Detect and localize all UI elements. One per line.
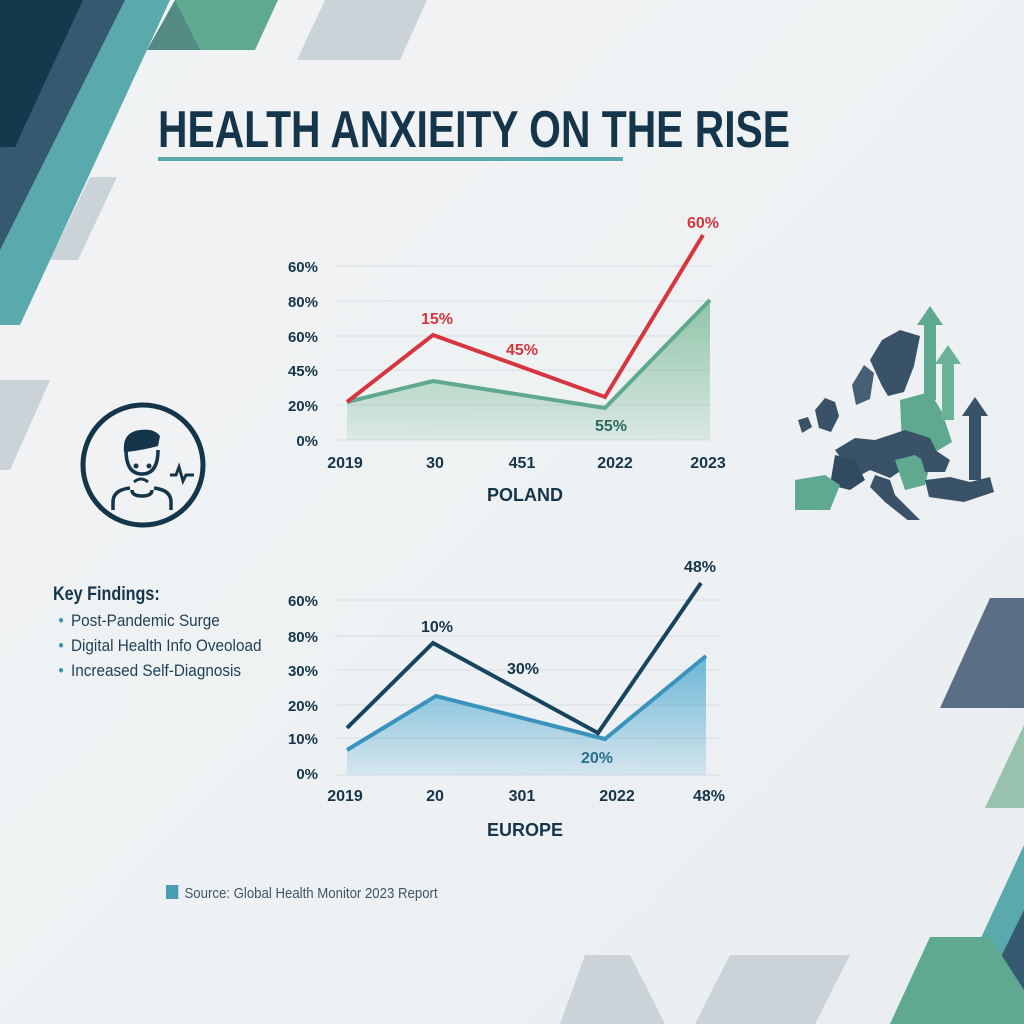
chart: Europe: 48% <box>684 559 716 576</box>
chart: Europe: 30% <box>507 661 539 678</box>
chart: Europe: 20 <box>426 788 444 805</box>
findings list: • Post-Pandemic Surge <box>58 611 220 630</box>
chart: Europe: 20% <box>581 750 613 767</box>
title underline <box>158 157 623 161</box>
chart: Europe: 48% <box>693 788 725 805</box>
chart: Poland: 451 <box>509 455 535 472</box>
arrows <box>917 306 988 480</box>
map of Europe with arrows <box>795 306 994 520</box>
chart: Poland: 60% <box>288 259 318 276</box>
chart: Poland: 15% <box>421 311 453 328</box>
chart: Poland: 60% <box>687 215 719 232</box>
chart: Poland: 45% <box>288 363 318 380</box>
source note: Source: Global Health Monitor 2023 Report <box>184 885 438 902</box>
key findings heading: Key Findings: <box>53 584 160 605</box>
chart: Europe: 80% <box>288 629 318 646</box>
icon: anxious person <box>80 402 206 528</box>
chart: Europe: 2022 <box>599 788 635 805</box>
chart: Europe: EUROPE <box>487 820 563 840</box>
chart: Poland: 2023 <box>690 455 726 472</box>
chart: Poland: 2022 <box>597 455 633 472</box>
chart: Europe: 301 <box>509 788 535 805</box>
chart: Poland: POLAND <box>487 485 563 505</box>
chart: Poland: 80% <box>288 294 318 311</box>
chart: Europe: 0% <box>296 766 318 783</box>
chart: Europe: 2019 <box>327 788 363 805</box>
chart: Europe: 10% <box>421 619 453 636</box>
findings list <box>58 611 261 680</box>
chart: Poland: 20% <box>288 398 318 415</box>
title: HEALTH ANXIEITY ON THE RISE <box>158 101 790 159</box>
chart: Poland: 2019 <box>327 455 363 472</box>
chart: Europe: 10% <box>288 731 318 748</box>
chart: Poland: 0% <box>296 433 318 450</box>
chart: Poland: 30 <box>426 455 444 472</box>
chart: Europe: 20% <box>288 698 318 715</box>
key findings <box>53 584 261 680</box>
findings list: • Digital Health Info Oveoload <box>58 636 261 655</box>
chart: Europe: 30% <box>288 663 318 680</box>
findings list: • Increased Self-Diagnosis <box>58 661 241 680</box>
chart: Poland: 45% <box>506 342 538 359</box>
chart: Europe: 60% <box>288 593 318 610</box>
chart: Poland: 60% <box>288 329 318 346</box>
chart: Poland: 55% <box>595 418 627 435</box>
